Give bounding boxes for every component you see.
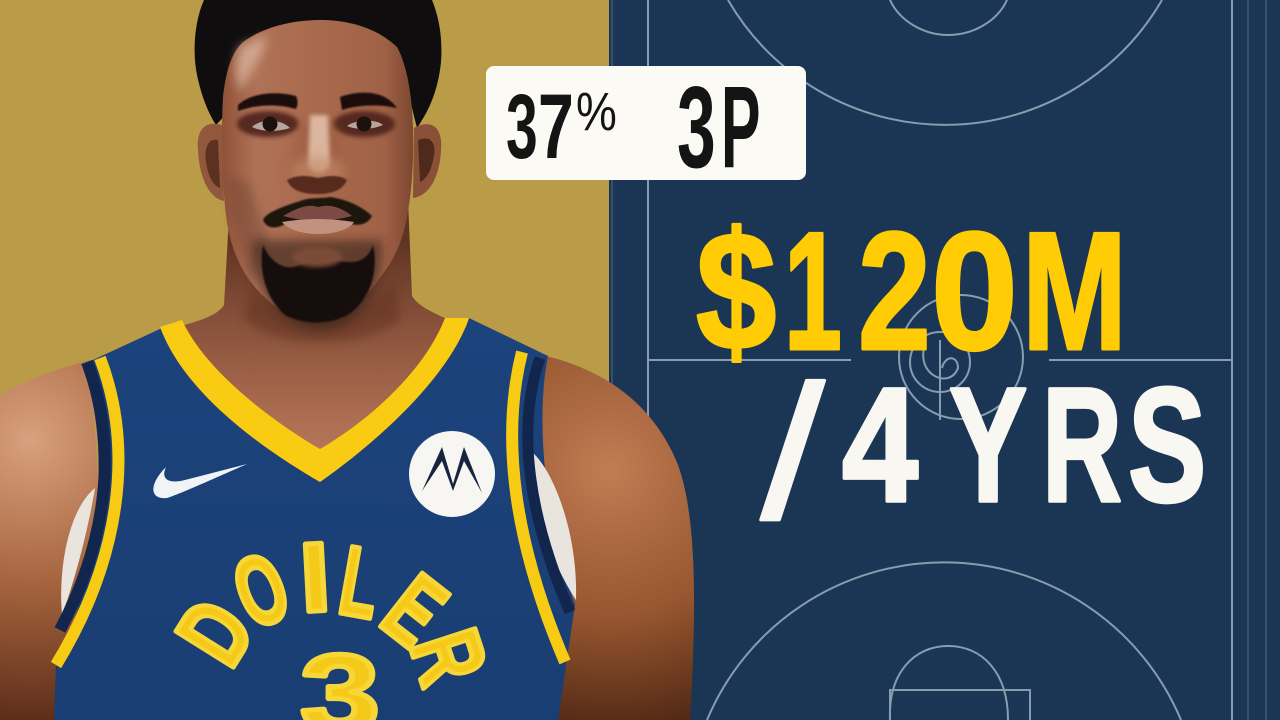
left armhole trim yellow <box>56 358 118 665</box>
forehead highlight <box>236 36 268 92</box>
panel: gold background <box>0 0 609 720</box>
mustache <box>263 197 372 227</box>
heading: contract length: / <box>761 347 825 559</box>
heading: contract length <box>761 347 1206 559</box>
collar trim <box>160 318 469 482</box>
beard shadow <box>252 240 382 330</box>
soul patch area skin <box>292 247 342 267</box>
iris left <box>262 116 278 132</box>
right armhole trim navy <box>528 358 570 612</box>
ear right <box>413 124 441 198</box>
face <box>222 20 413 322</box>
stat: percentage: 7 <box>538 75 574 178</box>
heading: contract value: M <box>1022 199 1127 385</box>
cheek stubble left <box>228 175 268 285</box>
jersey lettering: D <box>156 582 276 683</box>
chart: basketball court lines <box>612 0 1266 720</box>
heading: contract length: S <box>1128 354 1206 537</box>
stat: label <box>677 62 760 192</box>
jersey lettering: R <box>389 617 509 697</box>
neck and chest <box>150 200 480 490</box>
upper lip <box>283 206 352 220</box>
jersey lettering <box>156 522 509 720</box>
panel: navy court background <box>609 0 1280 720</box>
left undershirt <box>61 488 95 615</box>
right undershirt <box>533 453 576 600</box>
stat: label: 3 <box>677 63 716 192</box>
heading: contract length: R <box>1042 354 1122 536</box>
beard <box>262 245 375 323</box>
nose tip <box>290 157 346 183</box>
eyebrow left <box>238 93 298 111</box>
ear left <box>198 124 224 201</box>
ear right inner <box>418 138 434 182</box>
stat: percentage: 3 <box>506 76 538 178</box>
eye right <box>347 121 383 129</box>
neck shadow <box>245 280 400 342</box>
icon: swoosh <box>153 464 247 498</box>
eyebrow right <box>340 93 397 110</box>
right armhole trim yellow <box>512 352 565 662</box>
ear left inner <box>206 140 220 188</box>
right shoulder and arm <box>525 352 694 720</box>
stat: percentage <box>506 75 617 178</box>
heading: contract value: 0 <box>931 198 1018 385</box>
jersey body <box>54 318 575 720</box>
heading: contract value: 2 <box>858 197 931 385</box>
callout: stats badge <box>486 62 806 192</box>
stat: label: P <box>721 62 760 192</box>
eye socket right <box>333 111 395 137</box>
heading: contract value <box>696 196 1127 385</box>
nose highlight <box>308 115 330 172</box>
iris right <box>356 116 372 132</box>
jersey lettering: E <box>364 553 466 667</box>
heading: contract length: Y <box>949 354 1027 537</box>
icon: sponsor badge <box>409 431 495 517</box>
eye left <box>252 121 290 131</box>
lower lip <box>282 219 354 234</box>
heading: contract length: 4 <box>842 354 918 536</box>
heading: contract value: $ <box>696 198 776 385</box>
nostril shadow <box>287 176 347 194</box>
left armhole trim navy <box>60 362 105 630</box>
eye socket left <box>237 111 299 137</box>
person: basketball player <box>0 0 694 720</box>
heading: contract value: 1 <box>784 196 842 385</box>
jersey lettering: O <box>219 531 304 650</box>
jersey lettering: L <box>332 526 388 640</box>
hair <box>195 0 441 128</box>
jersey lettering: I <box>297 522 333 633</box>
stat: percentage: % <box>576 82 617 142</box>
left shoulder and arm <box>0 360 115 720</box>
nose side shadow <box>286 120 350 176</box>
